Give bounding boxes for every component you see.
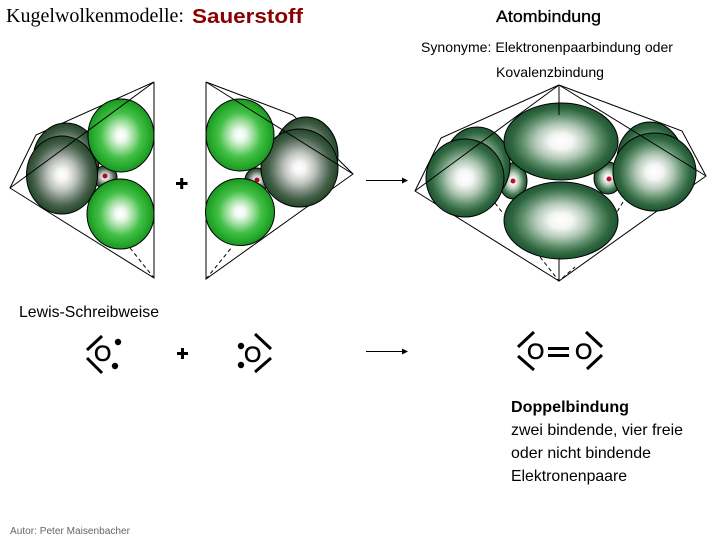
diagram: left oxygen atom (10, 82, 154, 278)
text block: synonyms: Kovalenzbindung (496, 64, 604, 80)
Lewis formula: oxygen molecule: O (527, 339, 544, 364)
Lewis formula: right oxygen atom: O (244, 342, 261, 367)
text block: synonyms: Synonyme: Elektronenpaarbindung oder (421, 39, 673, 55)
arrow: Lewis reaction (366, 348, 408, 354)
diagram: right oxygen atom (206, 82, 353, 279)
title (6, 5, 303, 28)
arrow: reaction of atoms (366, 178, 408, 184)
Lewis formula: left oxygen atom: O (94, 341, 111, 366)
diagram: oxygen molecule (415, 85, 706, 281)
plus sign: Lewis (177, 348, 188, 359)
plus sign: atoms (176, 178, 188, 189)
Lewis formula: oxygen molecule (518, 332, 602, 370)
Lewis formula: left oxygen atom (87, 336, 121, 373)
text block: double bond description (511, 399, 683, 485)
author credit: Autor: Peter Maisenbacher (10, 526, 131, 537)
text block: double bond description: oder nicht bindende (511, 445, 651, 462)
Lewis formula: oxygen molecule: O (575, 339, 592, 364)
Lewis formula: right oxygen atom (238, 334, 271, 372)
text block: double bond description: zwei bindende, vier freie (511, 422, 683, 439)
text block: double bond description: Elektronenpaare (511, 468, 627, 485)
heading: Atombindung: Atombindung (496, 7, 601, 26)
text block: synonyms (421, 39, 673, 80)
text block: double bond description: Doppelbindung (511, 399, 629, 416)
label: Lewis notation: Lewis-Schreibweise (19, 304, 159, 321)
title: Sauerstoff (192, 6, 303, 28)
title: Kugelwolkenmodelle: (6, 5, 184, 27)
